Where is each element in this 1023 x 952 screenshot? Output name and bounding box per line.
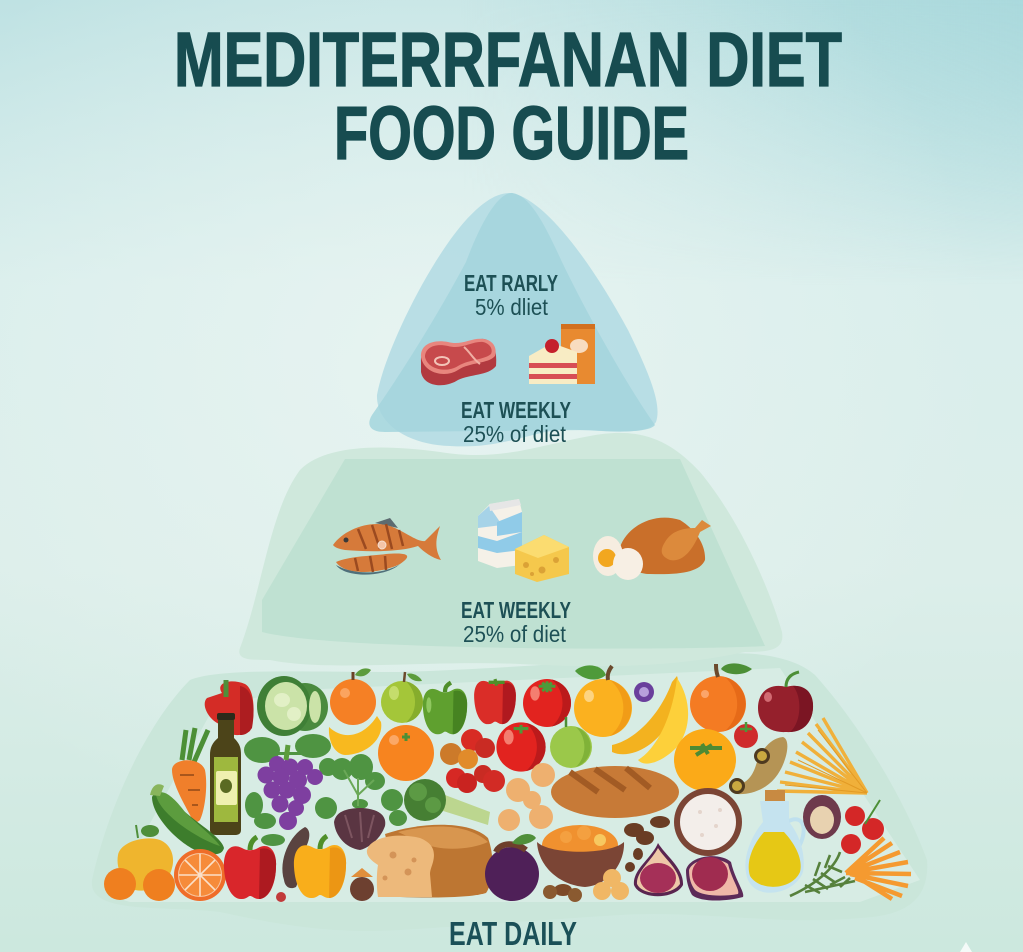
small tomato right — [734, 722, 758, 748]
yellow fruit — [574, 665, 632, 737]
tier label: eat rarely: 5% dliet — [475, 294, 549, 320]
red apple — [758, 672, 813, 732]
olive oil jug — [745, 790, 804, 893]
eggplant large — [485, 834, 539, 901]
small oranges — [104, 868, 175, 901]
tier label: eat daily: EAT DAILY — [449, 915, 577, 952]
fruit: green apple — [381, 672, 423, 723]
spaghetti — [777, 718, 867, 793]
olive oil bottle — [210, 713, 241, 835]
pyramid tier: bottom background — [92, 653, 927, 931]
root — [729, 737, 787, 794]
tier label: eat rarely: EAT RARLY — [464, 270, 558, 296]
orange large top — [690, 663, 752, 732]
icon: eggs and roast chicken — [593, 518, 711, 580]
carrot — [172, 728, 208, 822]
orange large — [378, 725, 434, 781]
title: MEDITERRFANAN DIET — [174, 17, 842, 103]
pasta bundle — [846, 838, 911, 899]
garlic — [803, 795, 841, 839]
tier label: eat weekly (upper): 25% of diet — [463, 421, 567, 447]
red pepper bottom — [224, 837, 276, 899]
tier label: eat weekly (lower) — [461, 597, 571, 647]
tier label: eat weekly (upper) — [461, 397, 571, 447]
chickpeas — [498, 763, 555, 831]
small cherry tomatoes — [841, 800, 884, 854]
chickpeas low — [593, 869, 629, 900]
red onion — [634, 682, 654, 702]
icon: milk carton and cheese — [478, 499, 569, 582]
persimmon — [674, 729, 736, 791]
beet — [334, 808, 385, 850]
tomato cluster — [440, 729, 505, 793]
figs — [634, 843, 743, 901]
rosemary — [790, 852, 855, 896]
green apple second — [550, 717, 592, 768]
red pepper small — [474, 679, 516, 724]
bread loaf — [367, 825, 492, 898]
long bread — [551, 766, 679, 818]
cabbage — [257, 676, 328, 736]
gold squash — [118, 825, 173, 891]
green pepper — [423, 683, 467, 734]
pyramid tier: top background — [369, 193, 658, 446]
food illustration cluster — [104, 663, 911, 902]
tier label: eat weekly (lower): 25% of diet — [463, 621, 567, 647]
leaves and vines — [244, 734, 407, 846]
eggplant small — [276, 827, 309, 902]
pyramid tier: middle background — [239, 433, 782, 666]
tier label: eat weekly (upper): EAT WEEKLY — [461, 397, 571, 423]
small pot — [350, 868, 374, 901]
small banana — [329, 716, 381, 755]
bananas — [612, 676, 688, 764]
tier label: eat rarely — [464, 270, 558, 320]
red pepper top — [205, 680, 254, 735]
icon: cake slice and snack bar — [529, 324, 595, 384]
title — [174, 17, 842, 175]
fruit: orange — [330, 668, 376, 725]
flour bowl — [674, 788, 742, 856]
tier label: eat weekly (lower): EAT WEEKLY — [461, 597, 571, 623]
citrus slice — [174, 849, 226, 901]
icon: fish — [333, 518, 441, 575]
yellow pepper — [294, 836, 346, 898]
tomato — [523, 679, 571, 727]
nuts — [543, 816, 670, 902]
zucchini — [150, 784, 224, 854]
broccoli — [404, 779, 490, 825]
icon: steak — [421, 339, 496, 385]
bowl of grains — [537, 825, 624, 887]
grapes — [258, 745, 323, 830]
tomato second row — [496, 722, 546, 772]
title: FOOD GUIDE — [334, 91, 689, 175]
